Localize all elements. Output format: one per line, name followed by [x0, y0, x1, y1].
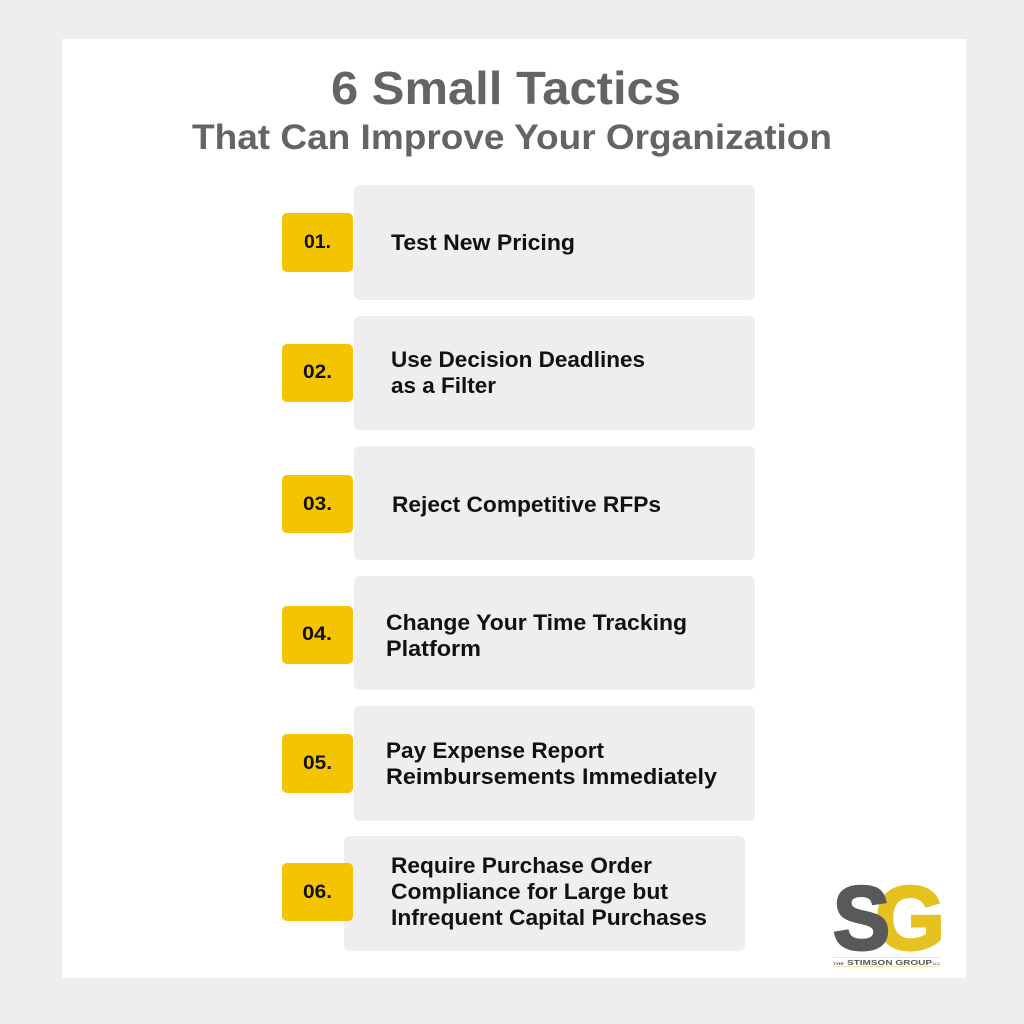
item 02: 02.: [303, 362, 332, 383]
item 04: [282, 576, 755, 690]
item 02: [282, 316, 755, 430]
logo: The Stimson Group: THE: [833, 961, 844, 966]
item 03: Reject Competitive RFPs: [392, 492, 661, 517]
item 01: Test New Pricing: [391, 230, 575, 255]
title: 6 Small Tactics: [331, 62, 681, 114]
logo: The Stimson Group: S: [833, 869, 890, 969]
item 05: 05.: [303, 753, 332, 774]
item 01: [282, 185, 755, 300]
item 04: 04.: [302, 624, 332, 645]
logo: The Stimson Group: STIMSON GROUP: [847, 958, 932, 967]
item 03: [282, 446, 755, 560]
logo: The Stimson Group: LLC: [933, 961, 940, 966]
item 04: Platform: [386, 636, 481, 661]
logo: The Stimson Group: G: [875, 869, 945, 969]
item 03: 03.: [303, 494, 332, 515]
item 06: [282, 836, 745, 951]
item 05: [282, 706, 755, 821]
item 05: Pay Expense Report: [386, 738, 605, 763]
item 02: Use Decision Deadlines: [391, 347, 645, 372]
title: [192, 62, 832, 157]
item 04: Change Your Time Tracking: [386, 610, 687, 635]
item 05: Reimbursements Immediately: [386, 764, 718, 789]
item 06: Require Purchase Order: [391, 853, 652, 878]
logo: The Stimson Group: [833, 869, 945, 969]
title: That Can Improve Your Organization: [192, 118, 832, 157]
item 02: as a Filter: [391, 373, 496, 398]
item 06: Compliance for Large but: [391, 879, 669, 904]
item 06: Infrequent Capital Purchases: [391, 905, 707, 930]
item 01: 01.: [304, 232, 331, 253]
item 06: 06.: [303, 882, 332, 903]
